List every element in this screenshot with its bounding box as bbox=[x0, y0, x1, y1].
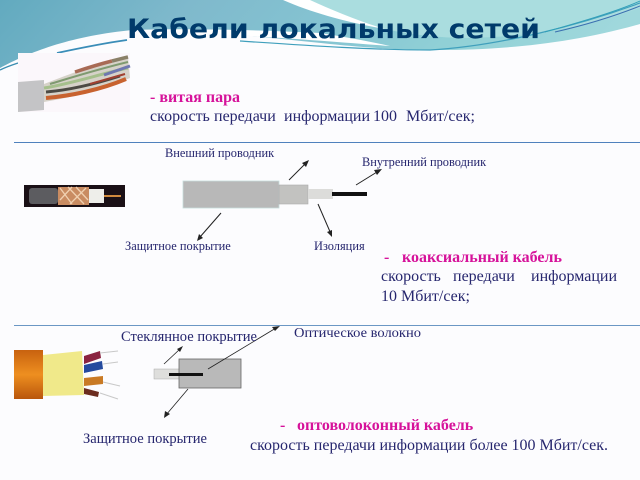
header swoosh background bbox=[0, 0, 640, 70]
title: Кабели локальных сетей bbox=[127, 14, 540, 45]
section 2 speed text: информации bbox=[531, 268, 617, 285]
diagram: fibre cross-section bbox=[154, 359, 241, 388]
photo: coaxial cable bbox=[24, 185, 125, 207]
arrow: glass cladding bbox=[164, 346, 183, 364]
divider 2 bbox=[14, 324, 640, 326]
label: outer conductor: Внешний проводник bbox=[165, 146, 275, 160]
label: protective jacket: Защитное покрытие bbox=[125, 239, 231, 253]
section 1 speed text: скорость bbox=[150, 108, 210, 125]
arrow: optical fibre bbox=[208, 326, 280, 369]
label: glass cladding: Стеклянное покрытие bbox=[121, 329, 257, 345]
section 1 speed text: Мбит/сек; bbox=[406, 108, 475, 125]
arrow: insulation bbox=[318, 204, 332, 237]
arrow: protective jacket bbox=[197, 213, 221, 241]
section 1 speed text: передачи bbox=[214, 108, 276, 125]
label: inner conductor: Внутренний проводник bbox=[362, 155, 487, 169]
photo: twisted pair cable bbox=[18, 53, 130, 112]
section 2 heading: coaxial: коаксиальный кабель bbox=[402, 249, 562, 266]
section 2 speed text: передачи bbox=[453, 268, 515, 285]
section 3 heading: fibre optic: оптоволоконный кабель bbox=[297, 417, 474, 434]
section 1 speed text: информации bbox=[284, 108, 370, 125]
section 1 heading: twisted pair: - витая пара bbox=[150, 89, 240, 106]
arrow: outer conductor bbox=[289, 160, 309, 180]
section 3 heading: fibre optic: - bbox=[280, 417, 285, 434]
section 2 speed text bbox=[381, 268, 617, 305]
section 3 speed text: скорость передачи информации более 100 Мбит/сек. bbox=[250, 437, 608, 454]
section 2 heading: coaxial: - bbox=[384, 249, 389, 266]
photo: fibre optic cable bbox=[14, 350, 120, 399]
diagram: coaxial cross-section bbox=[183, 181, 367, 208]
divider 1 bbox=[14, 142, 640, 144]
label: insulation: Изоляция bbox=[314, 239, 365, 253]
arrow: fibre protective jacket bbox=[164, 389, 188, 418]
section 1 speed text: 100 bbox=[373, 108, 397, 125]
section 2 speed text: 10 Мбит/сек; bbox=[381, 288, 470, 305]
label: optical fibre: Оптическое волокно bbox=[294, 326, 421, 341]
arrow: inner conductor bbox=[356, 169, 382, 185]
section 2 speed text: скорость bbox=[381, 268, 441, 285]
label: fibre protective jacket: Защитное покрытие bbox=[83, 431, 207, 447]
